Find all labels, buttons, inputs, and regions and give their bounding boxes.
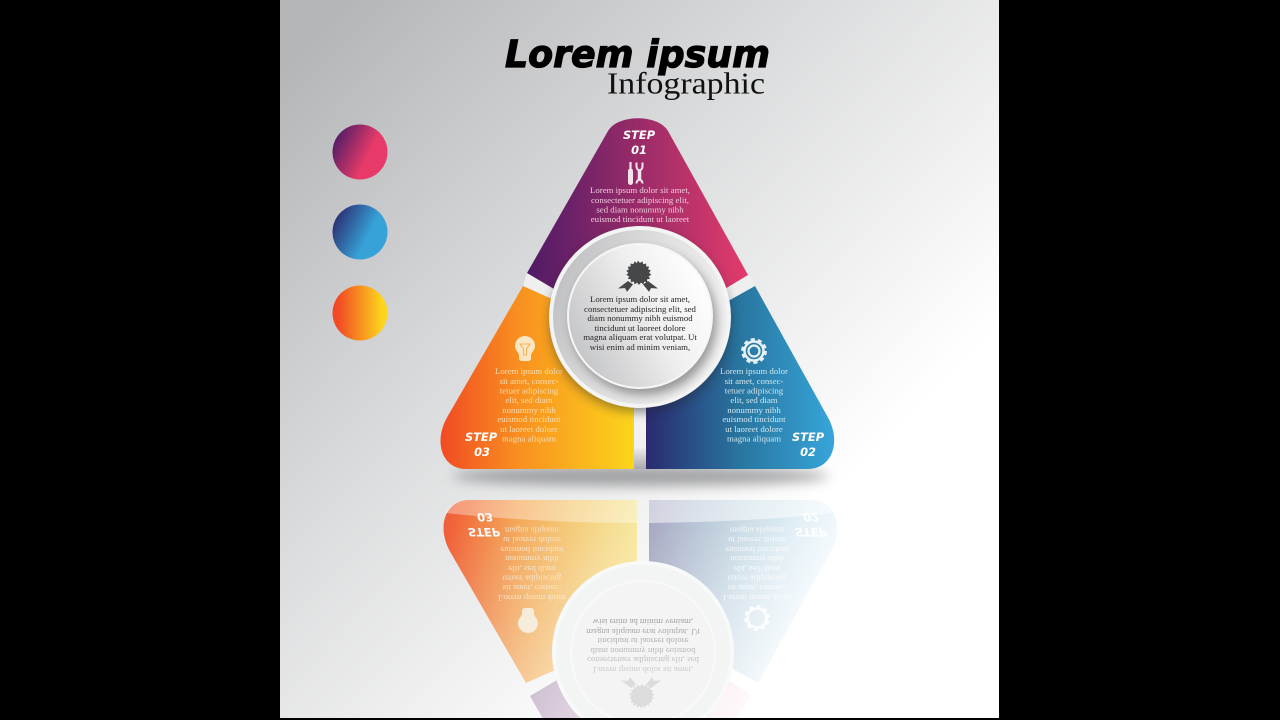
reflected panel: step 02: euismod tincidunt xyxy=(725,545,789,555)
step 03 text xyxy=(495,366,563,444)
reflected panel: step 03: elit, sed diam xyxy=(508,564,556,574)
gap strips xyxy=(523,273,755,469)
step 01 text: Lorem ipsum dolor sit amet, xyxy=(590,185,690,195)
step 01 text: sed diam nonummy nibh xyxy=(596,204,684,214)
reflected panel: step 02 xyxy=(649,500,837,683)
step 01 label: 01 xyxy=(631,143,647,157)
step 01 text: euismod tincidunt ut laoreet xyxy=(591,214,690,224)
reflected panel: step 03: Lorem ipsum dolor xyxy=(498,593,566,603)
step 02 text xyxy=(720,366,788,444)
step 01 label: STEP xyxy=(623,128,656,142)
step 02 label xyxy=(792,430,825,459)
icon: tools xyxy=(630,162,642,184)
reflected panel: step 03: sit amet, consec- xyxy=(503,583,562,593)
step 03 text: Lorem ipsum dolor xyxy=(495,366,563,376)
step 03 label: STEP xyxy=(465,430,498,444)
step 03 text: ut laoreet dolore xyxy=(500,424,558,434)
step 03 label xyxy=(465,430,498,459)
reflected panel: step 03: magna aliquam xyxy=(505,526,559,536)
icon: light bulb xyxy=(515,336,535,361)
step 03 text: magna aliquam xyxy=(502,434,556,444)
reflected centre circle: consectetuer adipiscing elit, sed xyxy=(587,655,700,665)
reflected panel: step 02: ut laoreet dolore xyxy=(728,535,786,545)
reflected panel: step 03 xyxy=(444,500,637,683)
centre text: diam nonummy nibh euismod xyxy=(587,313,693,323)
centre text xyxy=(583,294,697,352)
reflected panel: step 02: magna aliquam xyxy=(730,526,784,536)
centre text: tincidunt ut laoreet dolore xyxy=(594,323,686,333)
step 03 text: elit, sed diam xyxy=(505,395,553,405)
step 02 text: magna aliquam xyxy=(727,434,781,444)
centre text: consectetuer adipiscing elit, sed xyxy=(584,304,697,314)
reflected panel: step 03: STEP xyxy=(468,525,501,539)
step 03 label: 03 xyxy=(474,445,490,459)
icon: award badge xyxy=(618,261,658,292)
reflected panel: step 01 xyxy=(530,680,744,718)
reflected panel: step 02: nonummy nibh xyxy=(730,554,784,564)
reflected centre circle xyxy=(552,561,734,718)
reflected panel: step 02: Lorem ipsum dolor xyxy=(723,593,791,603)
reflected centre circle: wisi enim ad minim veniam, xyxy=(593,617,693,627)
step 02 text: Lorem ipsum dolor xyxy=(720,366,788,376)
reflected panel: step 02: tetuer adipiscing xyxy=(728,574,787,584)
reflected panel: step 03: 03 xyxy=(477,510,493,524)
step 02 text: euismod tincidunt xyxy=(722,414,786,424)
centre text: magna aliquam erat volutpat. Ut xyxy=(583,332,697,342)
panel: step 03 xyxy=(441,286,634,469)
step 03 text: tetuer adipiscing xyxy=(500,386,559,396)
step 01 text xyxy=(590,185,690,224)
reflected panel: step 03: euismod tincidunt xyxy=(500,545,564,555)
reflected panel: step 02: 02 xyxy=(803,510,819,524)
step 02 label: 02 xyxy=(800,445,816,459)
step 03 text: euismod tincidunt xyxy=(497,414,561,424)
reflected panel: step 03: tetuer adipiscing xyxy=(503,574,562,584)
step 03 text: nonummy nibh xyxy=(502,405,556,415)
centre circle xyxy=(549,226,731,408)
reflected centre circle: diam nonummy nibh euismod xyxy=(590,646,696,656)
title xyxy=(505,33,770,100)
step 02 text: sit amet, consec- xyxy=(725,376,784,386)
panel: step 02 xyxy=(646,286,834,469)
reflection xyxy=(444,500,837,718)
centre text: Lorem ipsum dolor sit amet, xyxy=(590,294,690,304)
centre text: wisi enim ad minim veniam, xyxy=(590,342,690,352)
reflected panel: step 02: sit amet, consec- xyxy=(728,583,787,593)
page background xyxy=(280,0,999,718)
step 03 text: sit amet, consec- xyxy=(500,376,559,386)
reflected panel: step 03: ut laoreet dolore xyxy=(503,535,561,545)
title: Infographic xyxy=(607,66,765,100)
panel: step 01 xyxy=(527,118,748,340)
reflected centre circle: magna aliquam erat volutpat. Ut xyxy=(586,627,700,637)
step 02 text: nonummy nibh xyxy=(727,405,781,415)
reflected centre circle: Lorem ipsum dolor sit amet, xyxy=(593,665,693,675)
reflected centre circle: tincidunt ut laoreet dolore xyxy=(597,636,689,646)
reflected panel: step 02: STEP xyxy=(795,525,828,539)
step 02 text: ut laoreet dolore xyxy=(725,424,783,434)
colour swatches xyxy=(332,124,388,340)
reflection gloss right xyxy=(649,500,833,523)
step 02 label: STEP xyxy=(792,430,825,444)
shadow of centre circle xyxy=(549,231,731,413)
bottom edge xyxy=(280,718,999,720)
step 01 text: consectetuer adipiscing elit, xyxy=(591,195,689,205)
ground shadow xyxy=(452,466,828,486)
title: Lorem ipsum xyxy=(505,33,770,76)
step 02 text: tetuer adipiscing xyxy=(725,386,784,396)
reflected panel: step 02: elit, sed diam xyxy=(733,564,781,574)
step 02 text: elit, sed diam xyxy=(730,395,778,405)
step 01 label xyxy=(623,128,656,157)
reflected panel: step 03: nonummy nibh xyxy=(505,554,559,564)
reflection gloss xyxy=(445,500,637,523)
icon: gear xyxy=(743,340,765,362)
